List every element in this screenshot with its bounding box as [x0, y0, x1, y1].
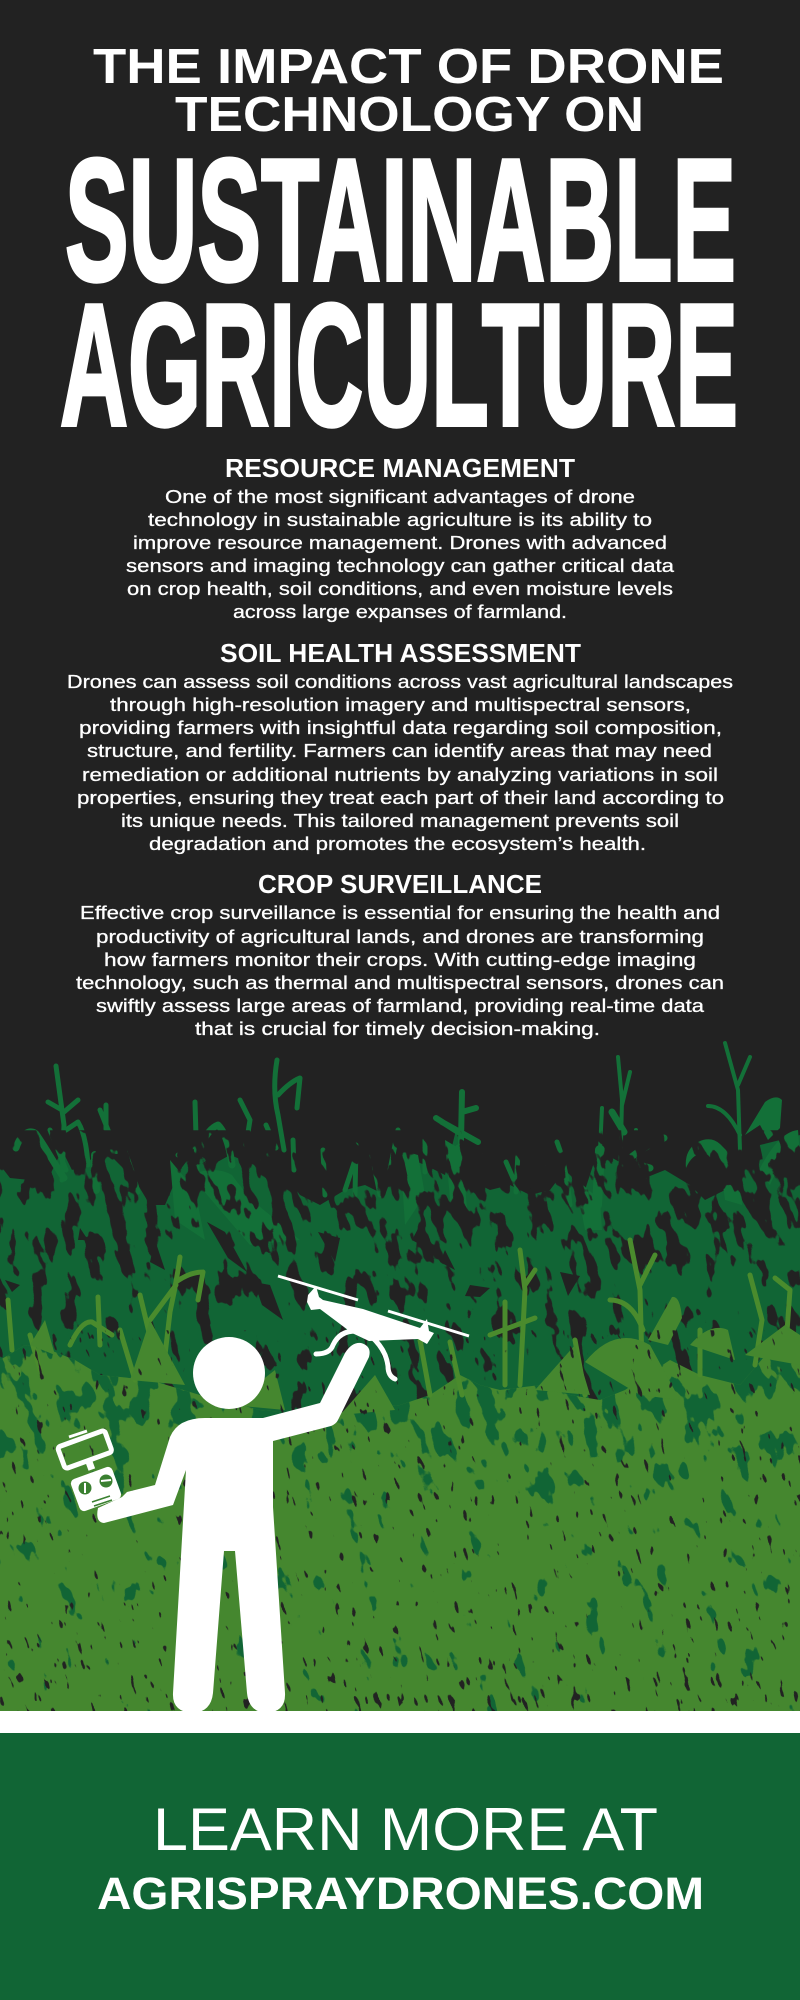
body text: degradation and promotes the ecosystem’s health.	[149, 833, 646, 854]
call to action: LEARN MORE AT	[153, 1796, 658, 1863]
icon: person holding drone and controller	[57, 1276, 469, 1713]
body text: swiftly assess large areas of farmland, providing real-time data	[96, 995, 705, 1016]
section: soil health assessment	[67, 638, 733, 854]
body text: providing farmers with insightful data regarding soil composition,	[79, 717, 722, 738]
body text: through high-resolution imagery and multispectral sensors,	[110, 694, 691, 715]
body text: on crop health, soil conditions, and even moisture levels	[127, 578, 673, 599]
body text: improve resource management. Drones with advanced	[133, 532, 667, 553]
head	[193, 1337, 265, 1409]
body text: across large expanses of farmland.	[233, 601, 567, 622]
footer text	[97, 1796, 704, 1919]
heading: SOIL HEALTH ASSESSMENT	[220, 638, 581, 668]
body	[97, 1343, 370, 1713]
landing gear	[316, 1331, 395, 1379]
section: crop surveillance	[76, 869, 724, 1039]
icon: remote controller	[70, 1461, 122, 1512]
body text: Drones can assess soil conditions across vast agricultural landscapes	[67, 671, 733, 692]
body text: properties, ensuring they treat each part of their land according to	[77, 787, 724, 808]
corn leaf blobs	[170, 1097, 800, 1245]
title line 2: TECHNOLOGY ON	[175, 87, 644, 142]
body text	[126, 486, 675, 622]
body text: that is crucial for timely decision-making.	[195, 1018, 600, 1039]
title line 1: THE IMPACT OF DRONE	[93, 39, 724, 94]
website url: AGRISPRAYDRONES.COM	[97, 1868, 704, 1919]
dark speckles in canopy	[0, 1130, 800, 1530]
icon: phone mounted on controller	[57, 1430, 112, 1469]
drone body	[307, 1286, 434, 1344]
black speckles on foreground	[0, 1330, 800, 1713]
body text: productivity of agricultural lands, and drones are transforming	[96, 926, 704, 947]
title	[60, 39, 738, 462]
body text: One of the most significant advantages of drone	[165, 486, 635, 507]
illustration: corn field	[0, 1043, 800, 1713]
heading: CROP SURVEILLANCE	[258, 869, 542, 899]
footer panel	[0, 1733, 800, 2000]
light green foreground crop	[0, 1340, 800, 1712]
dark green corn canopy	[0, 1130, 800, 1712]
section: resource management	[126, 453, 675, 622]
light green stalks and leaves	[8, 1240, 790, 1395]
rotors	[278, 1276, 469, 1336]
body text: structure, and fertility. Farmers can identify areas that may need	[87, 740, 712, 761]
body text: its unique needs. This tailored management prevents soil	[121, 810, 679, 831]
body text: technology in sustainable agriculture is its ability to	[148, 509, 652, 530]
body text	[76, 902, 724, 1039]
body text: technology, such as thermal and multispectral sensors, drones can	[76, 972, 724, 993]
dark green corn stalks and leaves	[16, 1043, 750, 1210]
heading: RESOURCE MANAGEMENT	[225, 453, 575, 483]
dark gaps in canopy	[5, 1222, 580, 1320]
body text: sensors and imaging technology can gather critical data	[126, 555, 675, 576]
body text: how farmers monitor their crops. With cutting-edge imaging	[104, 949, 696, 970]
body text	[67, 671, 733, 854]
white ground band	[0, 1711, 800, 1733]
light green leaf blobs	[30, 1297, 800, 1415]
body text: remediation or additional nutrients by analyzing variations in soil	[82, 764, 718, 785]
dark green speckles on foreground	[0, 1330, 800, 1713]
icon: drone	[278, 1276, 469, 1379]
body text: Effective crop surveillance is essential for ensuring the health and	[80, 902, 720, 923]
